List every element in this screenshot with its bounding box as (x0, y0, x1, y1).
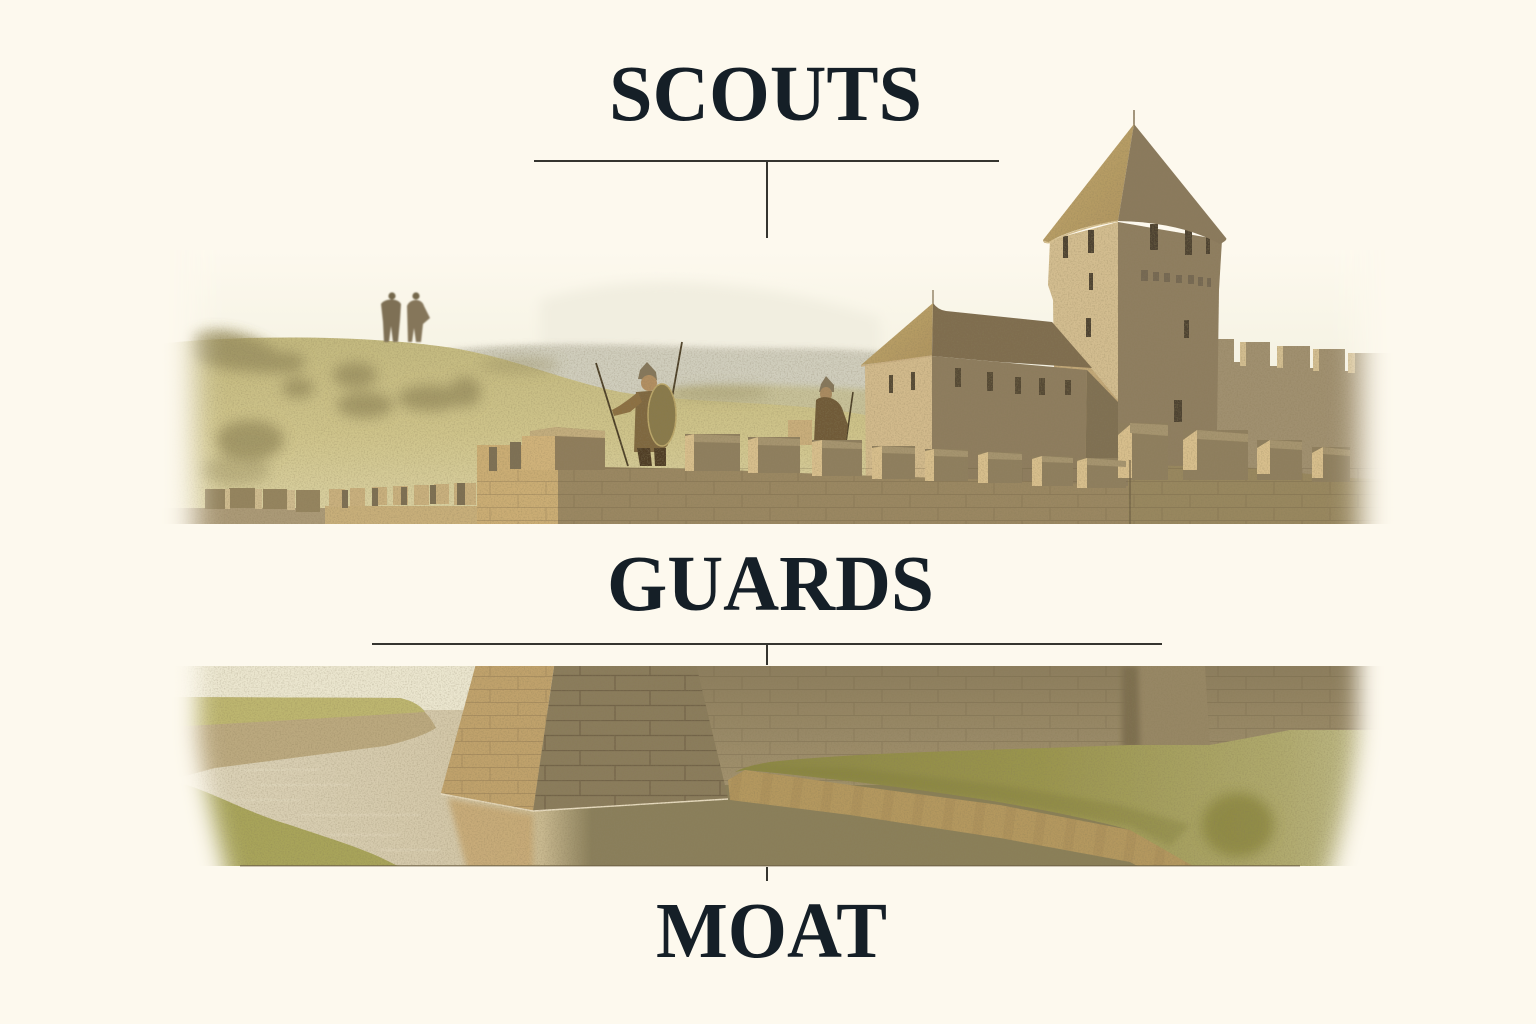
guard behind parapet (788, 376, 853, 445)
guard with shield and spears (596, 342, 682, 466)
hillside (176, 320, 866, 508)
connector: moat tick (766, 867, 768, 881)
main wall with battlements (477, 423, 1400, 530)
stone buttress (441, 660, 728, 811)
water ripples (230, 770, 440, 850)
panel: castle scene with scouts and guards (150, 110, 1400, 530)
bushes on hillside (190, 330, 770, 485)
pilaster (1122, 666, 1210, 748)
hall building (861, 290, 1118, 500)
far rear wall right of tower (1215, 339, 1400, 500)
far bank with grass (184, 697, 436, 774)
merlons (685, 430, 1350, 488)
divider under moat scene (240, 865, 1300, 866)
heading: guards: GUARDS (607, 541, 934, 628)
water (192, 710, 1138, 866)
heading: scouts: SCOUTS (609, 51, 922, 138)
distant ridge (548, 286, 826, 312)
far left wall (150, 483, 480, 530)
corner bastion lit face (477, 445, 558, 530)
connector: guards bracket (372, 644, 1162, 665)
haze behind the river bank (187, 666, 476, 710)
connector: scouts bracket (534, 161, 999, 238)
tower (1043, 110, 1226, 500)
buttress reflection (446, 796, 534, 866)
sky (274, 336, 1348, 371)
near grass lower left (192, 787, 398, 866)
heading: moat: MOAT (656, 888, 887, 975)
far hills (452, 341, 878, 415)
panel: moat scene (182, 666, 1375, 866)
rear fortress wall (696, 666, 1375, 785)
grass bank (728, 730, 1368, 866)
scouts on the hilltop (381, 292, 430, 342)
